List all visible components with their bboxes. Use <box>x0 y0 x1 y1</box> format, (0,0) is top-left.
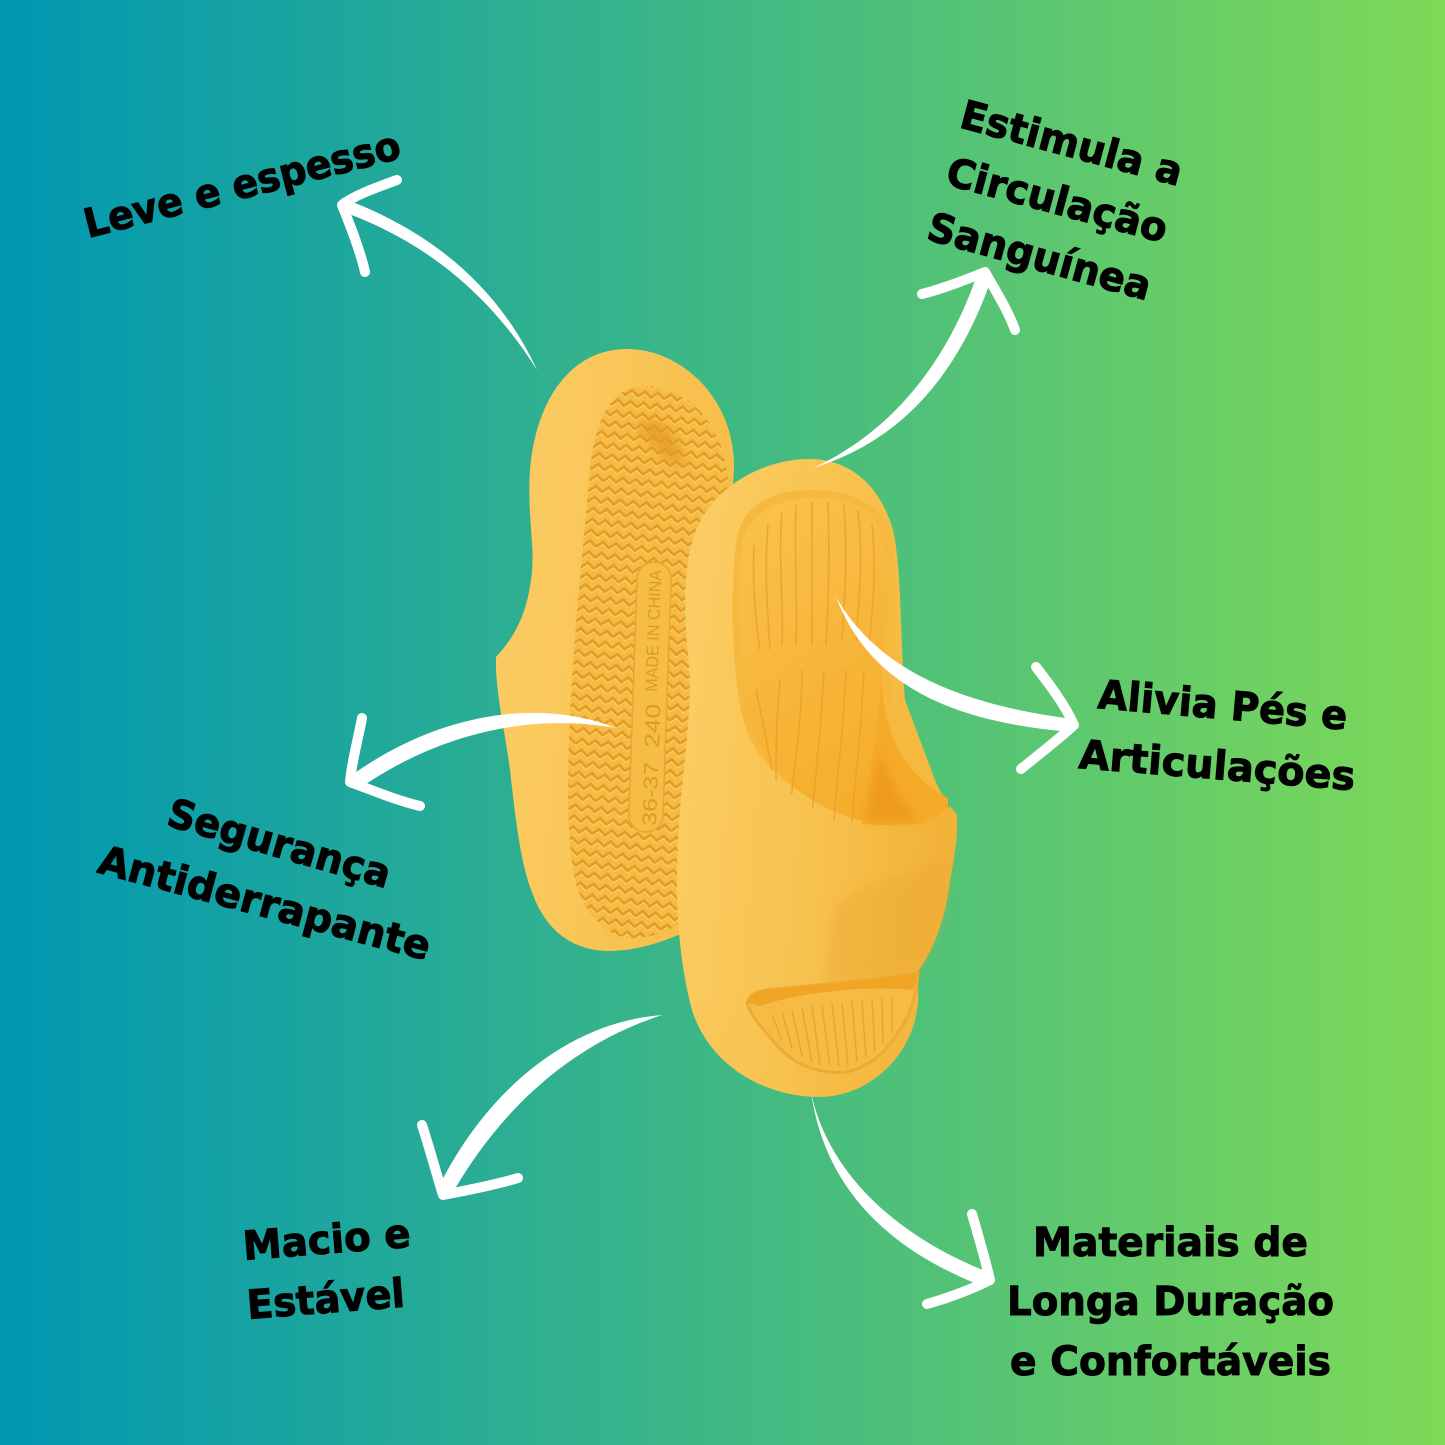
arrow: to Estimula a Circulação Sanguínea <box>813 272 1015 468</box>
toe inner shade <box>747 973 918 1006</box>
sole tread <box>568 386 728 938</box>
label: Materiais de Longa Duração e Confortáveis: Longa Duração <box>1007 1279 1334 1325</box>
slipper body <box>677 459 950 1097</box>
label: Segurança Antiderrapante: Antiderrapante <box>93 837 436 970</box>
arrow: to Segurança Antiderrapante <box>350 713 616 806</box>
footbed ribs <box>753 502 874 822</box>
heel shadow <box>638 420 686 468</box>
arrow: to Alivia Pés e Articulações <box>836 597 1074 769</box>
label: Materiais de Longa Duração e Confortáveis <box>1007 1220 1334 1385</box>
arrow: to Macio e Estável <box>422 1015 662 1195</box>
arrow: to Leve e espesso <box>338 180 537 370</box>
label: Alivia Pés e Articulações: Articulações <box>1077 732 1357 800</box>
label: Macio e Estável <box>241 1211 412 1329</box>
toe ribs <box>772 997 892 1066</box>
footbed rim <box>733 490 945 815</box>
size label plate: 240 <box>641 703 666 748</box>
label: Estimula a Circulação Sanguínea: Circulação <box>941 149 1173 252</box>
toe opening <box>747 973 918 1072</box>
arrow: to Materiais de Longa Duração e Confortáveis <box>811 1092 990 1304</box>
label: Alivia Pés e Articulações: Alivia Pés e <box>1096 672 1349 740</box>
label: Leve e espesso: Leve e espesso <box>79 123 405 248</box>
label: Estimula a Circulação Sanguínea: Estimula a <box>955 92 1188 196</box>
label: Materiais de Longa Duração e Confortáveis: e Confortáveis <box>1010 1339 1331 1385</box>
illustration: front slipper <box>677 459 957 1097</box>
size label plate <box>628 561 672 833</box>
inner wall shade <box>862 682 948 825</box>
size label plate: MADE IN CHINA <box>642 569 665 692</box>
label: Alivia Pés e Articulações <box>1077 672 1357 800</box>
label: Estimula a Circulação Sanguínea <box>922 92 1188 310</box>
label: Segurança Antiderrapante: Segurança <box>162 790 396 898</box>
label: Macio e Estável: Estável <box>245 1271 406 1329</box>
strap <box>680 713 957 1020</box>
illustration: back slipper showing sole <box>496 349 734 951</box>
size label plate: 36-37 <box>639 761 663 826</box>
label: Materiais de Longa Duração e Confortáveis: Materiais de <box>1033 1220 1308 1266</box>
label: Macio e Estável: Macio e <box>241 1211 412 1270</box>
footbed <box>739 498 945 822</box>
strap shadow <box>825 860 950 985</box>
label: Estimula a Circulação Sanguínea: Sanguínea <box>922 204 1156 310</box>
